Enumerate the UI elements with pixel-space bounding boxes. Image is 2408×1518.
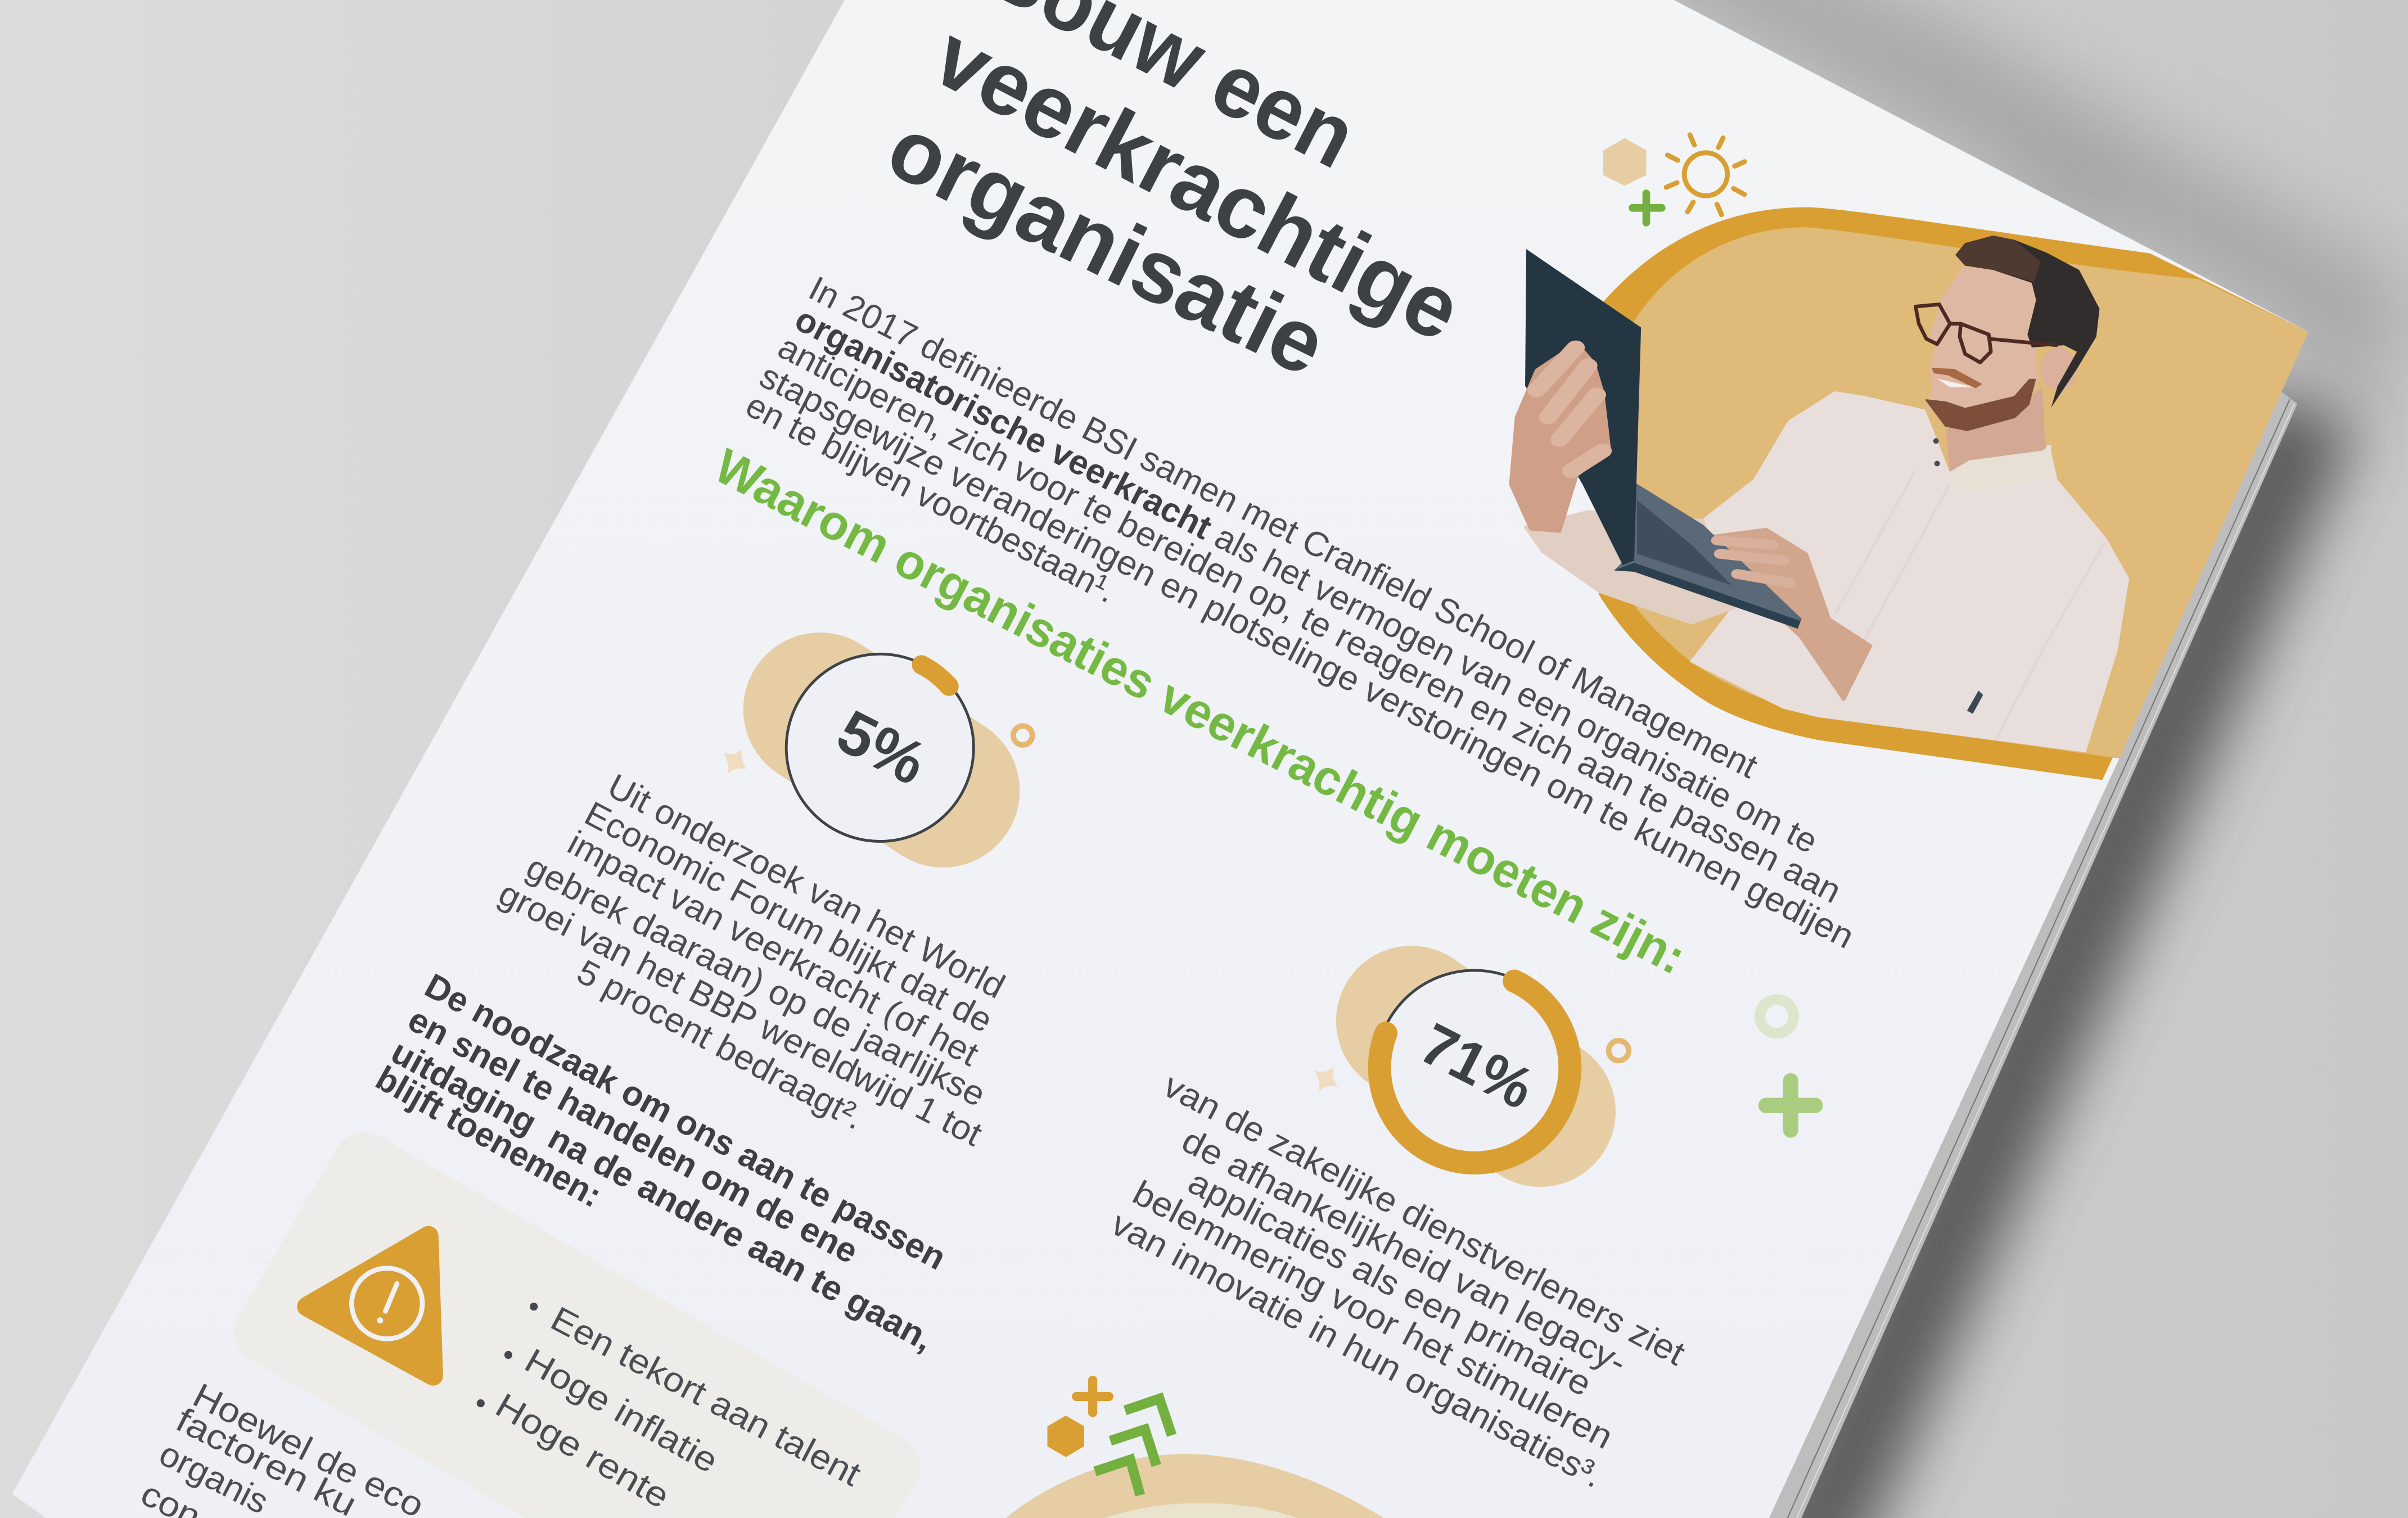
holding hand xyxy=(1511,343,1609,531)
bottom arc shape xyxy=(1006,1454,1384,1518)
cast shadow of the brochure xyxy=(1681,0,2408,1517)
text: 71% explanation: van de zakelijke dienstverleners ziet xyxy=(1157,1066,1691,1373)
page stack edge xyxy=(1769,390,2297,1518)
icon: hexagon top xyxy=(1603,138,1646,186)
text: closing paragraph cut off by frame: organis xyxy=(153,1434,274,1518)
icon: pale green ring xyxy=(1760,1000,1794,1033)
lighter fill xyxy=(1634,227,2308,758)
text: 71% explanation: van innovatie in hun organisaties³. xyxy=(1105,1204,1609,1496)
text: closing paragraph cut off by frame: Hoewel de eco xyxy=(187,1376,430,1518)
laptop base xyxy=(1614,482,1802,628)
icon: warning triangle xyxy=(307,1236,433,1376)
sparkle xyxy=(723,749,746,774)
text: 71% explanation: belemmering voor het stimuleren xyxy=(1126,1173,1619,1457)
blob xyxy=(1412,1021,1540,1112)
ring xyxy=(786,654,973,842)
shirt button xyxy=(1967,690,1983,714)
icon: orange hexagon bottom xyxy=(1047,1416,1084,1457)
laptop lid xyxy=(1525,249,1641,565)
intro paragraph: In 2017 definieerde BSI samen met Cranfield School of Management xyxy=(802,269,1764,786)
bullet list: Hoge inflatie xyxy=(518,1341,724,1481)
text: 71% explanation: applicaties als een primaire xyxy=(1182,1163,1598,1404)
moustache and teeth xyxy=(1932,368,1982,388)
ear xyxy=(2040,347,2077,390)
text: 5% explanation xyxy=(493,766,1011,1154)
panel background xyxy=(234,1132,921,1518)
ring xyxy=(1376,970,1572,1167)
text: 5% explanation: groei van het BBP wereldwijd 1 tot xyxy=(493,874,988,1154)
collar xyxy=(1946,444,2051,491)
progress arc xyxy=(922,665,949,686)
small ring xyxy=(1609,1041,1629,1060)
text: closing paragraph cut off by frame: factoren ku xyxy=(170,1400,363,1518)
title: veerkrachtige xyxy=(919,6,1477,360)
man head xyxy=(1915,236,2099,491)
photo panel: orange shape with man and laptop xyxy=(1511,207,2308,780)
text: 5% explanation: Uit onderzoek van het World xyxy=(601,766,1011,1006)
bullet list: Hoge rente xyxy=(489,1386,676,1516)
intro paragraph: en te blijven voortbestaan¹. xyxy=(739,386,1122,611)
green heading: Waarom organisaties veerkrachtig moeten zijn: xyxy=(706,438,1694,985)
bold statement: en snel te handelen om de ene xyxy=(402,1000,864,1271)
number: 5% xyxy=(827,697,937,798)
number: 71% xyxy=(1410,1010,1544,1122)
typing fingers xyxy=(1717,540,1789,583)
hair xyxy=(1955,236,2099,408)
blob xyxy=(820,710,943,790)
intro paragraph: organisatorische veerkracht als het vermogen van een organisatie om te xyxy=(789,300,1824,861)
stat: 5% xyxy=(723,654,1032,842)
shirt folds xyxy=(1835,471,2105,740)
text: 5% explanation: impact van veerkracht (of het xyxy=(561,823,985,1074)
beard xyxy=(1926,379,2035,430)
neck xyxy=(1946,386,2047,475)
buttons xyxy=(1933,438,1939,444)
sparkle xyxy=(1315,1067,1338,1092)
glasses xyxy=(1915,304,2058,363)
bullet list: Een tekort aan talent xyxy=(544,1299,867,1494)
title: organisatie xyxy=(873,97,1341,395)
icon: sun xyxy=(1666,135,1744,215)
intro paragraph: stapsgewijze veranderingen en plotselinge verstoringen om te kunnen gedijen xyxy=(754,356,1860,956)
bold statement: De noodzaak om ons aan te passen xyxy=(418,966,952,1277)
stat: 71% xyxy=(1315,970,1629,1167)
icon: green chevrons xyxy=(1095,1399,1172,1495)
intro paragraph: anticiperen, zich voor te bereiden op, te reageren en zich aan te passen aan xyxy=(772,327,1847,911)
icon: orange plus bottom xyxy=(1076,1380,1109,1412)
bold statement: blijft toenemen: xyxy=(369,1059,608,1215)
typing forearm xyxy=(1715,529,1870,699)
shirt xyxy=(1692,392,2128,751)
bold statement: uitdaging na de andere aan te gaan, xyxy=(385,1032,940,1359)
text: 5% explanation: Economic Forum blijkt dat de xyxy=(578,794,999,1040)
man body and laptop xyxy=(1511,249,2128,751)
progress arc xyxy=(1379,981,1570,1163)
bullet list xyxy=(477,1299,867,1516)
panel: challenges callout xyxy=(234,1132,921,1518)
face xyxy=(1926,268,2038,425)
text: 71% explanation xyxy=(1105,1066,1691,1496)
icon: green plus top xyxy=(1633,193,1662,223)
text: 71% explanation: de afhankelijkheid van legacy- xyxy=(1176,1121,1633,1382)
orange band xyxy=(1599,207,2308,780)
text: 5% explanation: gebrek daaraan) op de jaarlijkse xyxy=(520,848,991,1114)
small ring xyxy=(1013,726,1032,745)
text: 5% explanation: 5 procent bedraagt². xyxy=(571,952,871,1137)
held arm sleeve xyxy=(1525,511,1735,624)
icon: pale green plus xyxy=(1766,1081,1815,1130)
